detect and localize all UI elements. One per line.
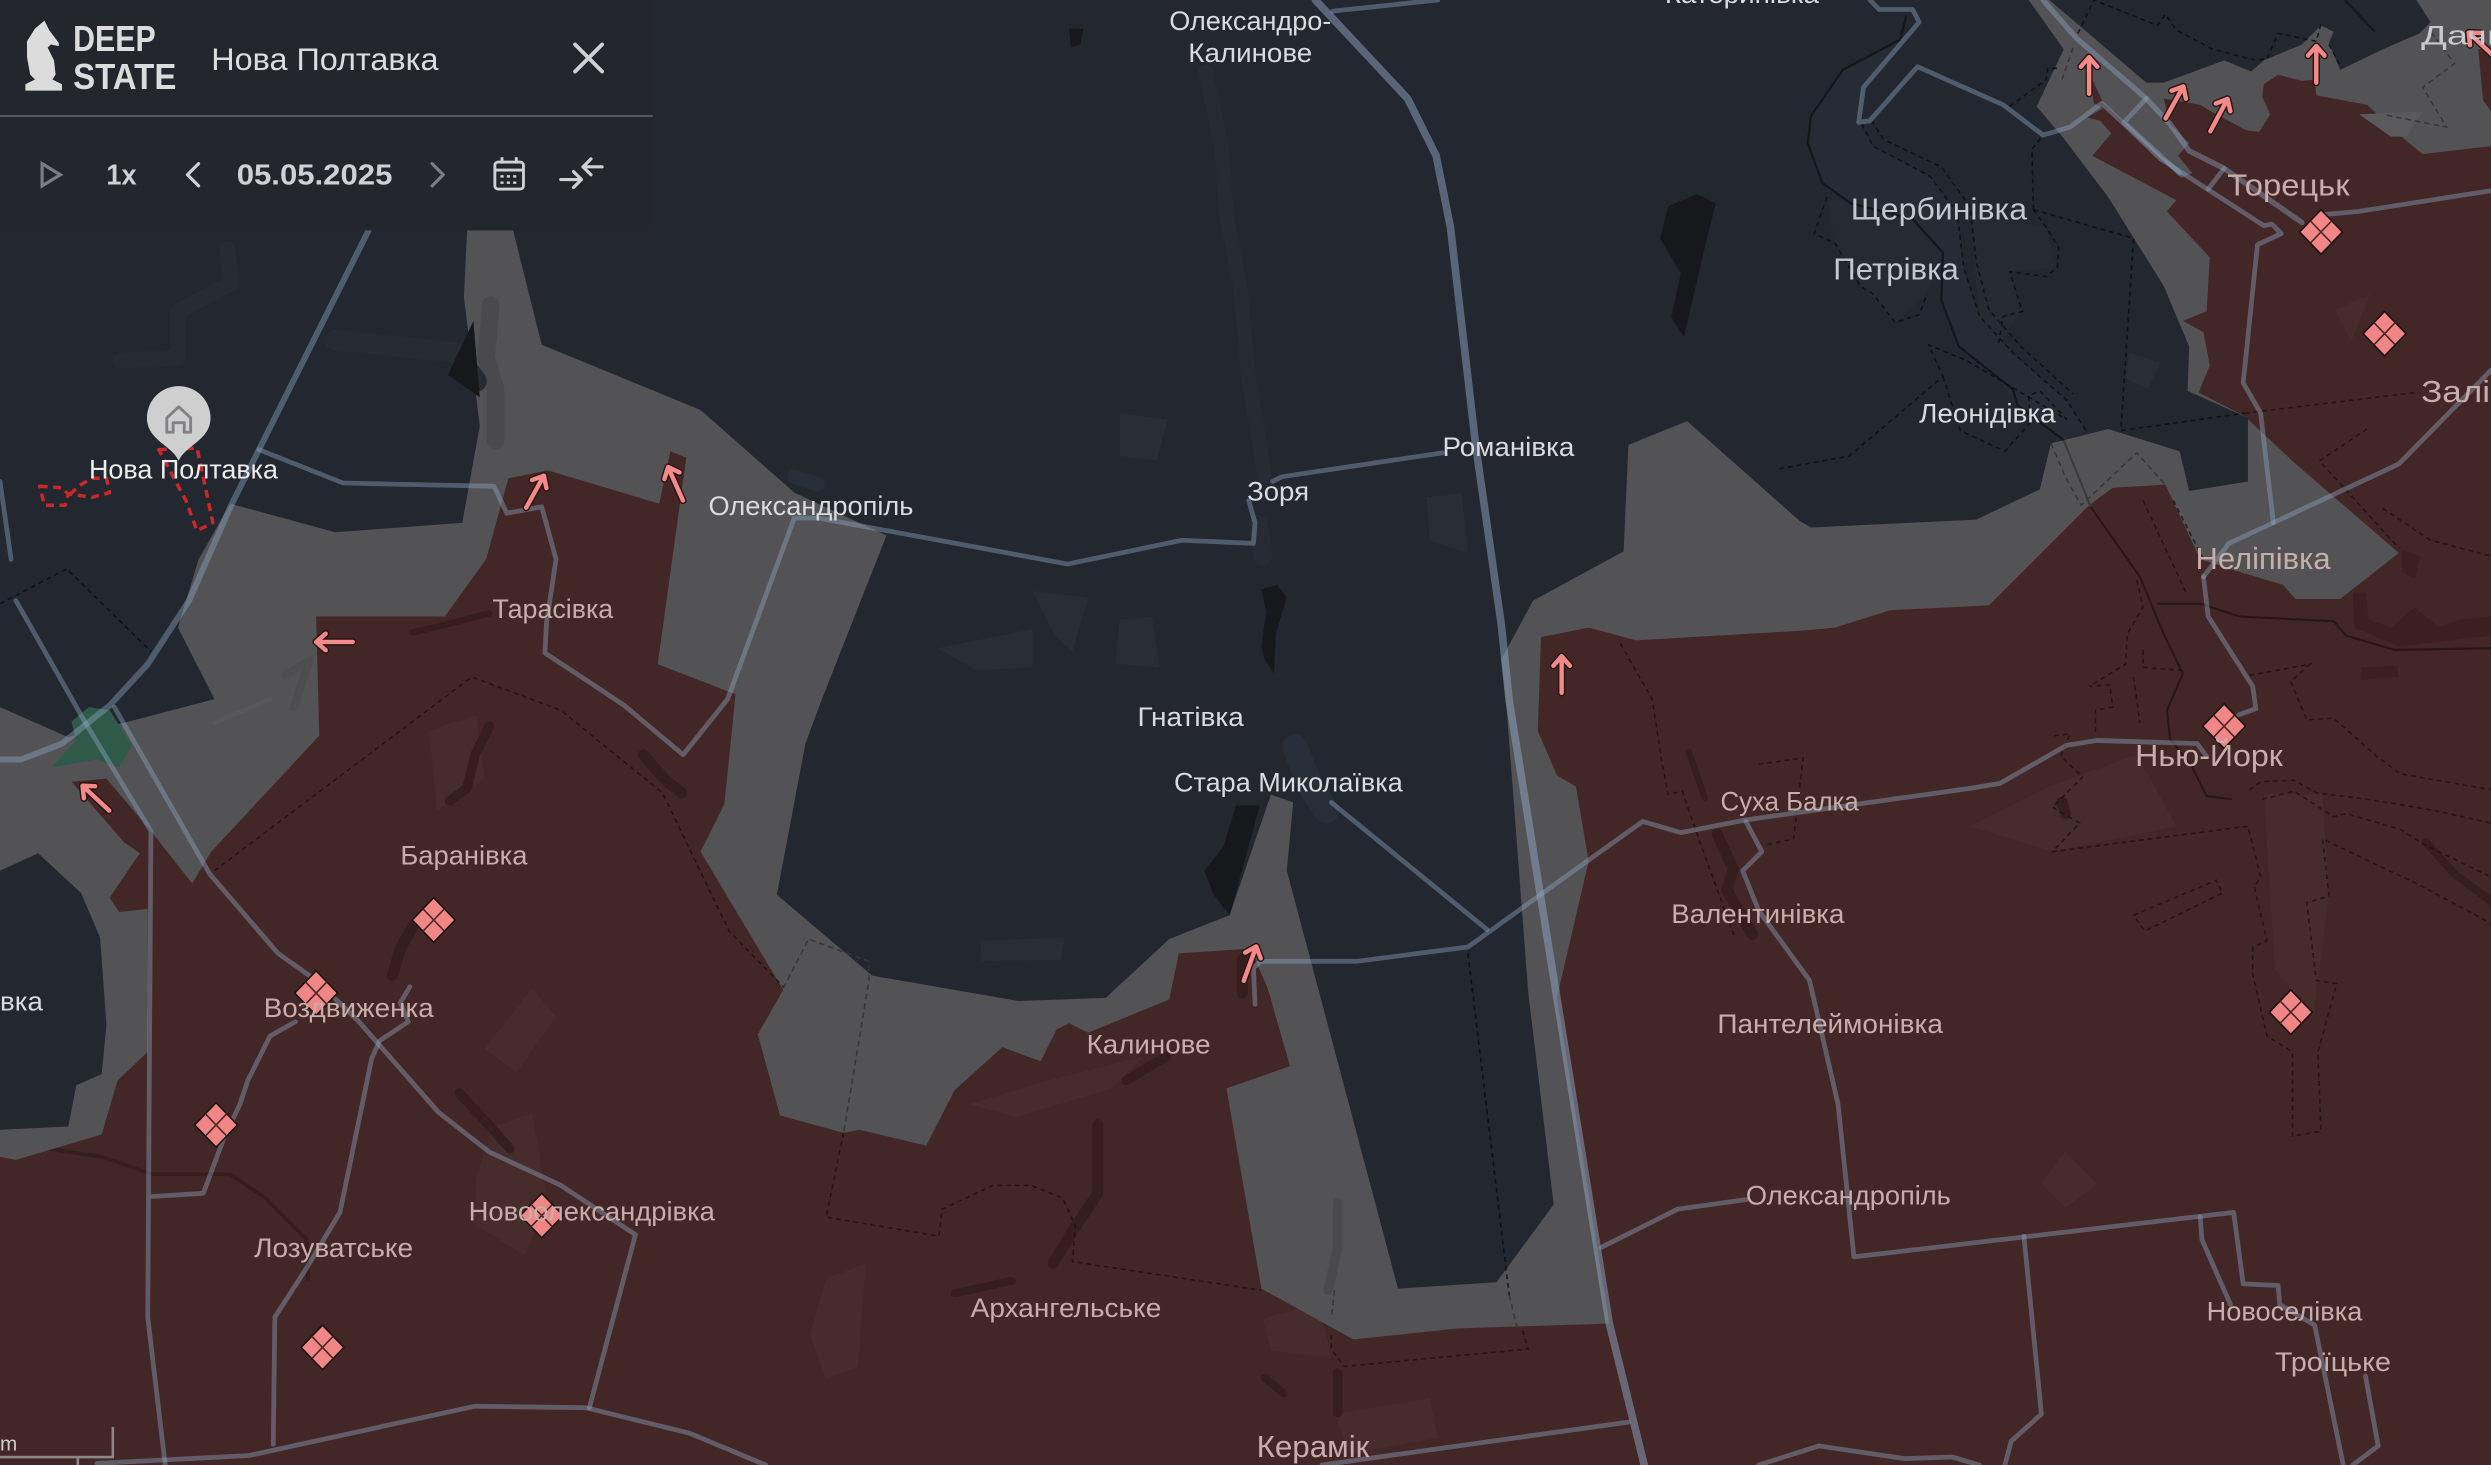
- place labels on dark territory: Олександропіль: [709, 491, 913, 521]
- features on grey zone: [214, 111, 2423, 1290]
- date: 05.05.2025: [237, 159, 393, 191]
- scale bar: [0, 1427, 113, 1465]
- logo text: DEEP: DEEP: [73, 18, 156, 59]
- icon: play: [42, 164, 60, 186]
- place labels on dark territory: вка: [0, 987, 44, 1017]
- occupied sliver top right: [2478, 48, 2491, 111]
- place labels on occupied territory: Неліпівка: [2196, 543, 2331, 576]
- place labels on dark territory: Нова Полтавка: [89, 454, 279, 484]
- place labels on dark territory: Щербинівка: [1851, 193, 2027, 226]
- place labels on occupied territory: Архангельське: [971, 1293, 1161, 1323]
- water bodies: [448, 29, 1716, 915]
- diamond markers: [195, 210, 2406, 1370]
- icon: calendar: [495, 157, 523, 189]
- icon: previous day: [187, 164, 199, 186]
- place labels on dark territory: Калинове: [1188, 38, 1312, 68]
- place labels on dark territory: Стара Миколаївка: [1174, 767, 1404, 797]
- scale bar: m: [0, 1433, 17, 1456]
- settlement boundaries in grey zone: [783, 32, 2454, 1328]
- place labels on dark territory: [0, 0, 2491, 1017]
- place labels on dark territory: Олександро-: [1169, 6, 1331, 36]
- place labels on dark territory: Петрівка: [1833, 254, 1959, 287]
- friendly-held pocket: dark area west: [0, 853, 106, 1130]
- place labels on dark territory: Леонідівка: [1919, 399, 2057, 429]
- place labels on dark territory: Гнатівка: [1137, 702, 1245, 732]
- place labels on dark territory: Романівка: [1442, 432, 1575, 462]
- friendly-held pocket: north-east of Toretsk road: [2049, 0, 2431, 83]
- place labels on occupied territory: Тарасівка: [492, 594, 614, 624]
- logo text: STATE: STATE: [73, 56, 176, 97]
- map pin: Нова Полтавка: [147, 386, 210, 461]
- place labels on occupied territory: Керамік: [1257, 1431, 1370, 1464]
- settlement boundaries in dark territory: [0, 0, 2342, 651]
- panel title: Нова Полтавка: [211, 41, 439, 77]
- direction arrows: [77, 27, 2491, 984]
- green control patch: [51, 707, 132, 767]
- place labels on occupied territory: Суха Балка: [1721, 786, 1860, 816]
- place labels on dark territory: Зоря: [1247, 477, 1309, 507]
- friendly-held territory: dark area north: [0, 0, 2248, 1289]
- place labels on occupied territory: Олександропіль: [1746, 1180, 1951, 1210]
- control panel: [0, 0, 653, 230]
- place labels on occupied territory: Лозуватське: [254, 1233, 413, 1263]
- place labels on occupied territory: Новоселівка: [2207, 1296, 2363, 1326]
- place labels on occupied territory: Троїцьке: [2275, 1347, 2391, 1377]
- place labels on occupied territory: Баранівка: [400, 840, 528, 870]
- icon: next day: [432, 164, 443, 186]
- features on occupied territory: [38, 294, 2491, 1454]
- icon: knight logo: [25, 21, 62, 91]
- rivers: [1808, 0, 2491, 799]
- place labels on occupied territory: Валентинівка: [1671, 899, 1845, 929]
- settlement boundaries on occupied territory: [214, 392, 2491, 1366]
- place labels on occupied territory: Торецьк: [2227, 169, 2350, 202]
- place labels on occupied territory: [254, 169, 2491, 1464]
- red outlined settlement: [40, 448, 213, 531]
- place labels on occupied territory: Пантелеймонівка: [1717, 1009, 1944, 1039]
- speed label: 1x: [106, 159, 137, 191]
- icon: compare arrows: [561, 159, 602, 187]
- place labels on occupied territory: Калинове: [1087, 1029, 1211, 1059]
- place labels on occupied territory: Воздвиженка: [264, 993, 435, 1023]
- fields and streams on dark area: [121, 40, 2161, 961]
- icon: close: [575, 44, 602, 72]
- place labels on occupied territory: Новоолександрівка: [469, 1196, 716, 1226]
- place labels on occupied territory: Нью-Йорк: [2135, 739, 2284, 773]
